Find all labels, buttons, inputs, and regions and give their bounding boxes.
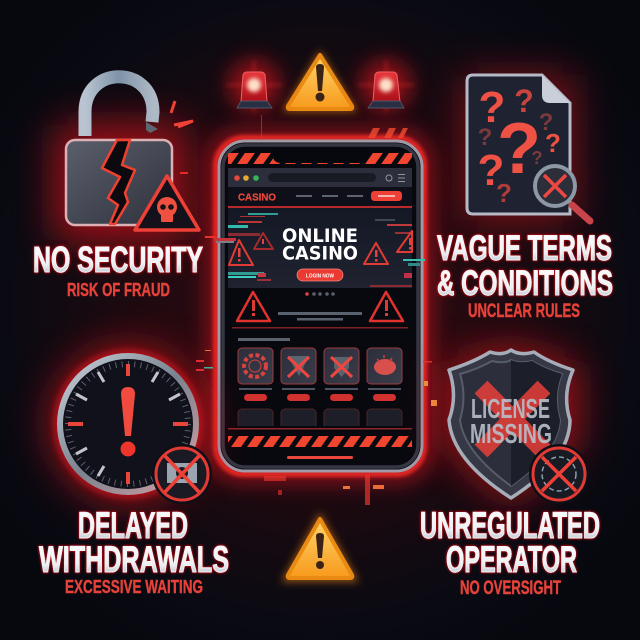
site navigation [228, 187, 412, 208]
faded card row [238, 409, 402, 426]
text lines [278, 312, 362, 320]
icon: document: ? [496, 178, 512, 208]
heading [437, 229, 613, 303]
panel: vague terms [437, 75, 613, 322]
heading [420, 505, 600, 580]
icon: shield: MISSING [470, 418, 552, 449]
card icon: crossed shield [331, 357, 352, 377]
lower triangle marks [252, 300, 388, 316]
panel: delayed withdrawals [39, 344, 229, 597]
icon: crossed money badge [152, 444, 212, 504]
icon: right siren [358, 59, 414, 112]
notch [273, 148, 367, 163]
lower warning triangles [237, 292, 403, 321]
glitch lines [214, 213, 425, 287]
card icon: red emblem [374, 355, 396, 375]
login button [297, 269, 343, 281]
drips and particles [180, 115, 437, 505]
card captions [239, 388, 401, 390]
icon: document: ? [478, 146, 504, 195]
carousel dots [305, 292, 335, 296]
panel: unregulated operator [420, 345, 600, 599]
lock glow [55, 125, 185, 240]
icon: shield [449, 350, 573, 498]
hero banner [214, 208, 425, 288]
heading [39, 505, 229, 580]
login button: LOGIN NOW [306, 274, 335, 280]
icon: document: ? [545, 128, 561, 158]
icon: clock gauge [60, 356, 196, 492]
panel: no security [33, 77, 203, 300]
icon: crossed regulator badge [529, 444, 589, 504]
alert: top warning triangle [282, 50, 358, 112]
heading: DELAYED [78, 505, 188, 546]
icon: document [467, 75, 570, 214]
subheading: UNCLEAR RULES [468, 301, 580, 322]
card pills [244, 394, 396, 401]
hero title [282, 225, 358, 264]
icon: skull warning [135, 176, 199, 230]
game cards [238, 348, 402, 426]
icon: document: ? [497, 109, 541, 189]
phone body [219, 141, 422, 471]
warning triangles [229, 231, 412, 265]
icon: magnifier with cross [535, 166, 590, 221]
icon: document: ? [532, 148, 542, 168]
icon: left siren [226, 59, 282, 112]
heading: WITHDRAWALS [39, 539, 229, 580]
browser bar [228, 168, 412, 187]
triangle marks [238, 238, 412, 262]
heading: NO SECURITY [33, 239, 203, 280]
subheading: EXCESSIVE WAITING [65, 577, 203, 597]
card icon: chip [244, 355, 266, 377]
icon: document: ? [479, 83, 505, 132]
icon: document: ? [478, 124, 492, 151]
icon: broken padlock [66, 77, 193, 225]
icon: document: ? [514, 83, 534, 119]
panel: online casino phone [214, 141, 425, 471]
phone halo [206, 128, 434, 484]
card icon: crossed gem [288, 356, 309, 377]
hero title: CASINO [282, 242, 358, 264]
alert: bottom warning triangle [281, 512, 359, 582]
hero title: ONLINE [282, 225, 358, 247]
site navigation: CASINO [238, 192, 276, 204]
icon: shield: LICENSE [471, 393, 550, 424]
icon: document: ? [539, 109, 553, 136]
subheading: RISK OF FRAUD [67, 280, 170, 300]
top hazard stripes [228, 153, 412, 164]
subheading: NO OVERSIGHT [460, 578, 561, 599]
bottom hazard bar [228, 428, 412, 459]
